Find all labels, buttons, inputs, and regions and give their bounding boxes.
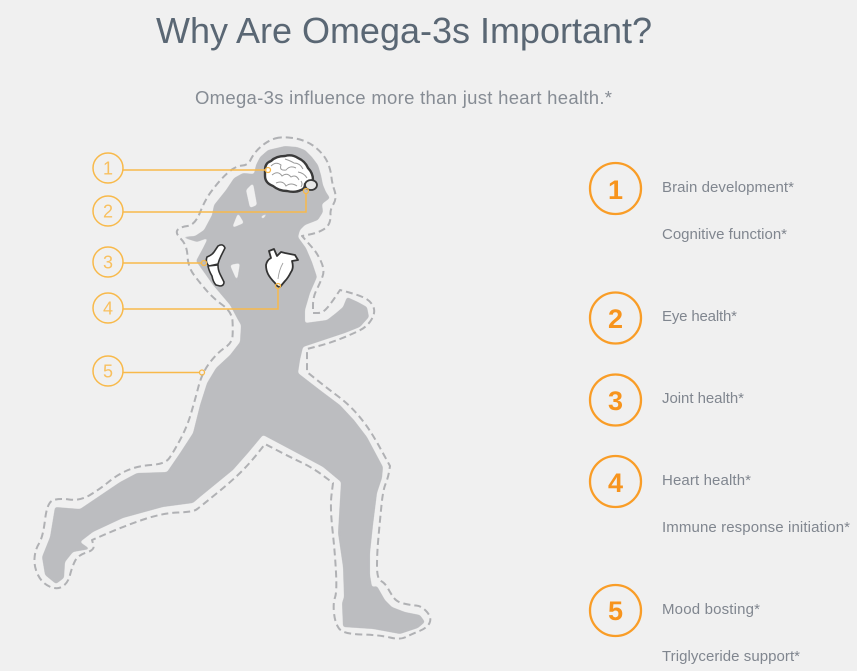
callout 1: 1 — [103, 158, 113, 178]
benefit 3: Joint health* — [662, 390, 744, 407]
benefit 5: 5 — [608, 596, 623, 626]
callout 4 — [93, 284, 280, 323]
benefit 1 — [590, 163, 794, 243]
callout 3 — [93, 247, 206, 277]
benefit 3 — [590, 374, 744, 426]
icon: knee joint — [206, 245, 225, 286]
benefit 2: Eye health* — [662, 308, 737, 325]
subtitle: Omega-3s influence more than just heart health.* — [195, 87, 612, 108]
callout 2 — [93, 188, 308, 226]
benefit 4: Immune response initiation* — [662, 519, 850, 536]
benefit 4 — [590, 456, 850, 536]
silhouette body — [42, 146, 425, 634]
benefit 5: Mood bosting* — [662, 601, 760, 618]
title: Why Are Omega-3s Important? — [156, 10, 652, 51]
benefit 2: 2 — [608, 304, 623, 334]
benefit 4: Heart health* — [662, 472, 751, 489]
benefit 2 — [590, 292, 737, 344]
callout 3: 3 — [103, 252, 113, 272]
benefit 1: Cognitive function* — [662, 226, 787, 243]
benefit 4: 4 — [608, 468, 623, 498]
icon: cerebellum — [305, 180, 317, 190]
runner figure — [34, 137, 430, 639]
icon: brain — [265, 155, 317, 192]
callout 5 — [93, 356, 204, 386]
icon: heart — [266, 249, 298, 287]
benefit 5 — [590, 585, 800, 665]
callout 4: 4 — [103, 298, 113, 318]
callout 1 — [93, 153, 270, 183]
callout 5: 5 — [103, 362, 113, 382]
benefit 1: Brain development* — [662, 179, 794, 196]
benefit 1: 1 — [608, 175, 623, 205]
benefit 3: 3 — [608, 386, 623, 416]
benefit 5: Triglyceride support* — [662, 648, 800, 665]
callout 2: 2 — [103, 202, 113, 222]
dashed outline — [34, 137, 430, 639]
